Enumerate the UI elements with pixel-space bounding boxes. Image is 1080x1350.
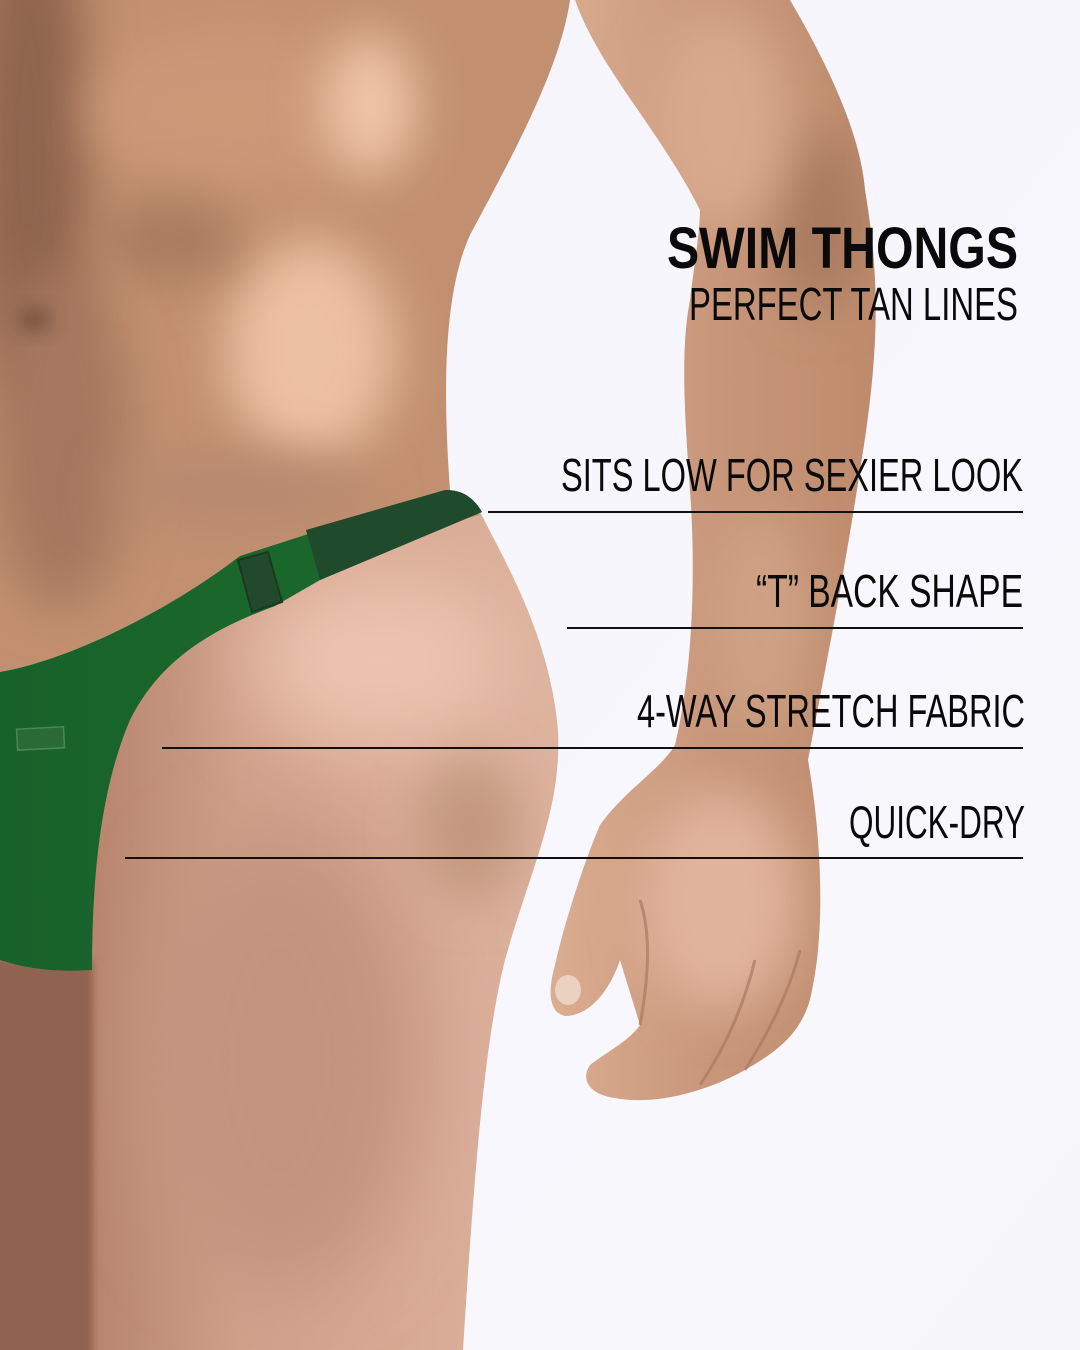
torso	[0, 0, 570, 672]
feature list	[125, 449, 1025, 859]
arm and hand	[540, 0, 890, 1110]
logo tag	[17, 727, 65, 750]
title: SWIM THONGS	[667, 216, 1018, 281]
waistband slider	[238, 552, 282, 612]
thumbnail	[555, 975, 581, 1005]
text: heading block	[667, 216, 1018, 330]
leg and hip	[0, 500, 600, 1350]
waistband dark section	[306, 490, 482, 580]
finger creases	[640, 900, 800, 1085]
swim thong	[0, 490, 482, 971]
